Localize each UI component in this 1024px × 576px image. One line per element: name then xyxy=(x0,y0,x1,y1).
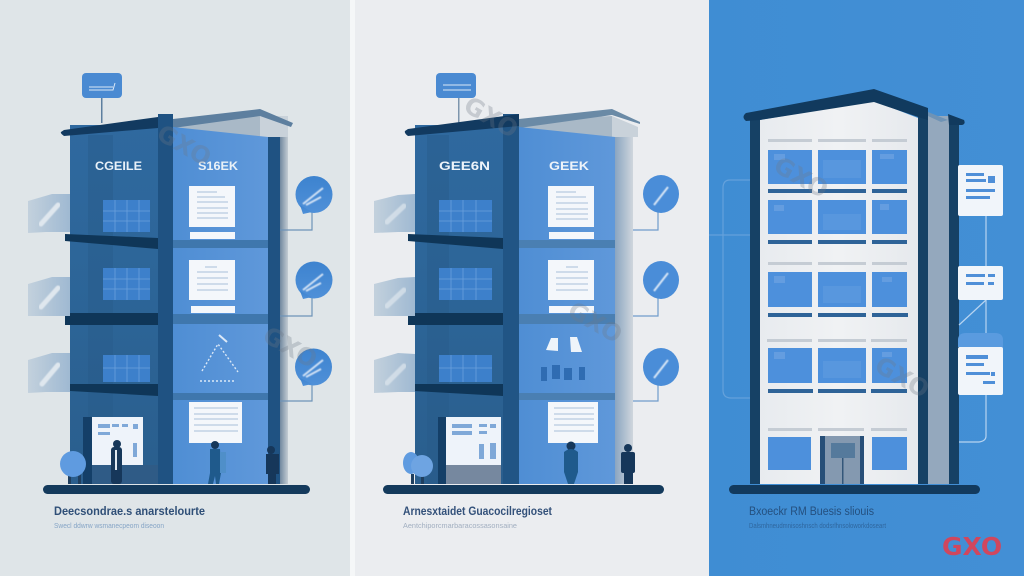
divider strip xyxy=(350,0,355,576)
windows: left wing xyxy=(439,200,492,382)
icons: leaf bubbles xyxy=(643,175,679,386)
connector lines xyxy=(959,216,986,442)
main roof xyxy=(61,117,158,136)
panel: left building xyxy=(28,73,332,530)
caption: right subtext: Dalsmhneudmnisoshnsch dodsrlhnsoloworkdoseart xyxy=(749,523,886,530)
left wall stripes xyxy=(427,135,449,484)
ground line xyxy=(729,485,980,494)
faint pipe outline xyxy=(709,180,750,398)
right annex strip xyxy=(615,137,633,484)
documents: right wing xyxy=(548,186,598,443)
panel: middle building xyxy=(374,73,679,530)
right wall xyxy=(173,127,268,484)
floor slabs xyxy=(65,234,268,400)
connectors xyxy=(633,210,658,401)
icon: tree xyxy=(60,451,86,484)
right annex strip xyxy=(280,137,288,484)
watermarks: GXO xyxy=(258,321,322,374)
panel: right background xyxy=(709,0,1024,576)
heading: left wing label: GEE6N xyxy=(439,161,490,173)
watermarks: GXO xyxy=(769,151,833,204)
card: bottom xyxy=(958,333,1003,395)
windows grid xyxy=(768,150,907,470)
grey side roof xyxy=(519,109,640,137)
panel: right building xyxy=(709,89,1003,530)
doorway screen xyxy=(438,417,501,484)
watermarks: GXO xyxy=(152,119,216,172)
roof xyxy=(744,89,965,125)
floor slabs xyxy=(408,234,615,400)
window sills xyxy=(768,189,908,393)
right wall xyxy=(519,127,615,484)
icon: tree xyxy=(403,452,433,484)
doorway screen xyxy=(83,417,158,484)
caption: middle subtext: Aentchiporcmarbaracossasonsaine xyxy=(403,521,517,530)
heading: right wing label: GEEK xyxy=(549,161,590,173)
panel: middle background xyxy=(350,0,709,576)
icons: leaf bubbles xyxy=(295,176,332,386)
grey lintels xyxy=(767,139,907,431)
roof highlight xyxy=(928,112,948,122)
diagram: triangle xyxy=(200,335,238,381)
connectors xyxy=(280,210,312,401)
heading: right wing label: S16EK xyxy=(198,161,239,173)
watermarks xyxy=(152,91,934,404)
heading: left wing label: CGEILE xyxy=(95,161,142,173)
people xyxy=(564,442,635,484)
card: middle xyxy=(958,266,1003,300)
main roof xyxy=(405,114,519,136)
white facade xyxy=(760,101,918,484)
door xyxy=(820,436,864,484)
windows: left wing xyxy=(103,200,150,382)
icon: roof sign xyxy=(82,73,122,123)
watermarks: GXO xyxy=(563,296,627,349)
columns xyxy=(158,114,280,484)
documents: right wing xyxy=(189,186,242,443)
tile glyphs xyxy=(41,205,58,384)
panel: left background xyxy=(0,0,350,576)
ground line xyxy=(43,485,310,494)
caption: middle heading: Arnesxtaidet Guacocilregioset xyxy=(403,506,552,518)
window details xyxy=(774,154,894,378)
side wall xyxy=(928,116,949,484)
people xyxy=(111,440,279,484)
left wall stripes xyxy=(88,135,113,484)
icon: roof sign xyxy=(436,73,476,123)
left wall xyxy=(415,125,503,484)
tiles: left side xyxy=(28,194,70,393)
tiles: left side xyxy=(374,194,415,393)
watermarks: GXO xyxy=(870,351,934,404)
card: top xyxy=(958,165,1003,216)
caption: left subtext: Swecl ddwrw wsmanecpeom diseoon xyxy=(54,521,164,530)
tile glyphs xyxy=(387,206,404,383)
diagram: figures and blocks xyxy=(541,337,585,381)
logo: GXO: GXO xyxy=(942,532,1002,561)
caption: left heading: Deecsondrae.s anarstelourte xyxy=(54,506,205,518)
central column xyxy=(503,114,519,484)
left wall xyxy=(70,125,158,484)
watermarks: GXO xyxy=(459,91,523,144)
grey side roof xyxy=(173,109,293,137)
dark columns xyxy=(750,112,959,484)
ground line xyxy=(383,485,664,494)
caption: right heading: Bxoeckr RM Buesis sliouis xyxy=(749,506,874,518)
